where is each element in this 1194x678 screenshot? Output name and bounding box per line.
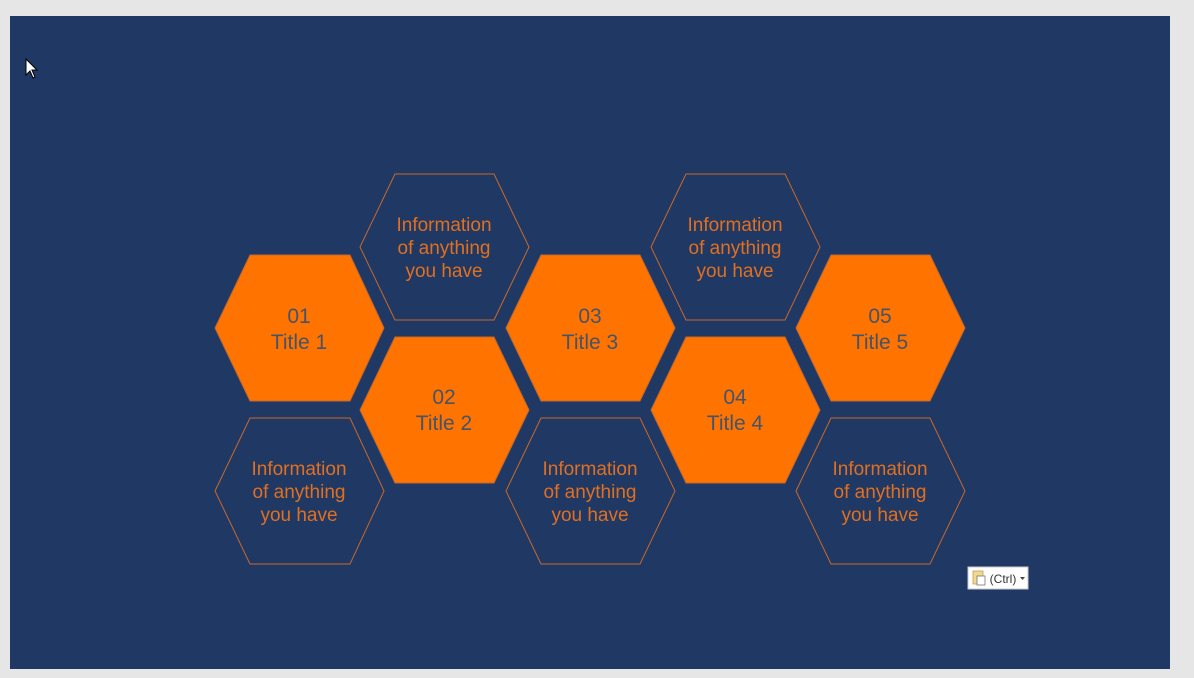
info hex above 04	[651, 174, 820, 320]
hex 02 Title 2	[360, 337, 529, 483]
hex 02 Title 2: 02	[432, 386, 456, 409]
cursor icon	[26, 59, 37, 78]
info hex below 05: of anything	[834, 482, 926, 503]
info hex above 04: Information	[687, 215, 783, 236]
hex 01 Title 1	[215, 255, 384, 401]
paste options button: (Ctrl)	[990, 572, 1016, 586]
info hex above 04: of anything	[689, 238, 781, 259]
info hex above 02: you have	[405, 261, 483, 282]
hex 05 Title 5	[796, 255, 965, 401]
info hex below 01	[215, 418, 384, 564]
info hex below 03	[506, 418, 675, 564]
info hex below 05: Information	[832, 459, 928, 480]
hex 02 Title 2: Title 2	[416, 412, 472, 435]
hex 01 Title 1: 01	[287, 305, 311, 328]
info hex below 01: you have	[260, 505, 338, 526]
info hex below 01: of anything	[253, 482, 345, 503]
hex 04 Title 4: Title 4	[707, 412, 764, 435]
hex 05 Title 5: 05	[868, 305, 892, 328]
info hex above 02	[360, 174, 529, 320]
info hex below 03: Information	[542, 459, 638, 480]
info hex above 04: you have	[696, 261, 774, 282]
hex 03 Title 3: Title 3	[562, 331, 618, 354]
hex 04 Title 4	[651, 337, 820, 483]
hex 05 Title 5: Title 5	[852, 331, 908, 354]
info hex below 03: you have	[551, 505, 629, 526]
hex 01 Title 1: Title 1	[271, 331, 327, 354]
info hex below 03: of anything	[544, 482, 636, 503]
info hex below 05	[796, 418, 965, 564]
info hex below 05: you have	[841, 505, 919, 526]
hex 03 Title 3	[506, 255, 675, 401]
hex 03 Title 3: 03	[578, 305, 602, 328]
paste options button	[968, 567, 1028, 589]
info hex above 02: Information	[396, 215, 492, 236]
info hex above 02: of anything	[398, 238, 490, 259]
info hex below 01: Information	[251, 459, 347, 480]
hex 04 Title 4: 04	[723, 386, 747, 409]
